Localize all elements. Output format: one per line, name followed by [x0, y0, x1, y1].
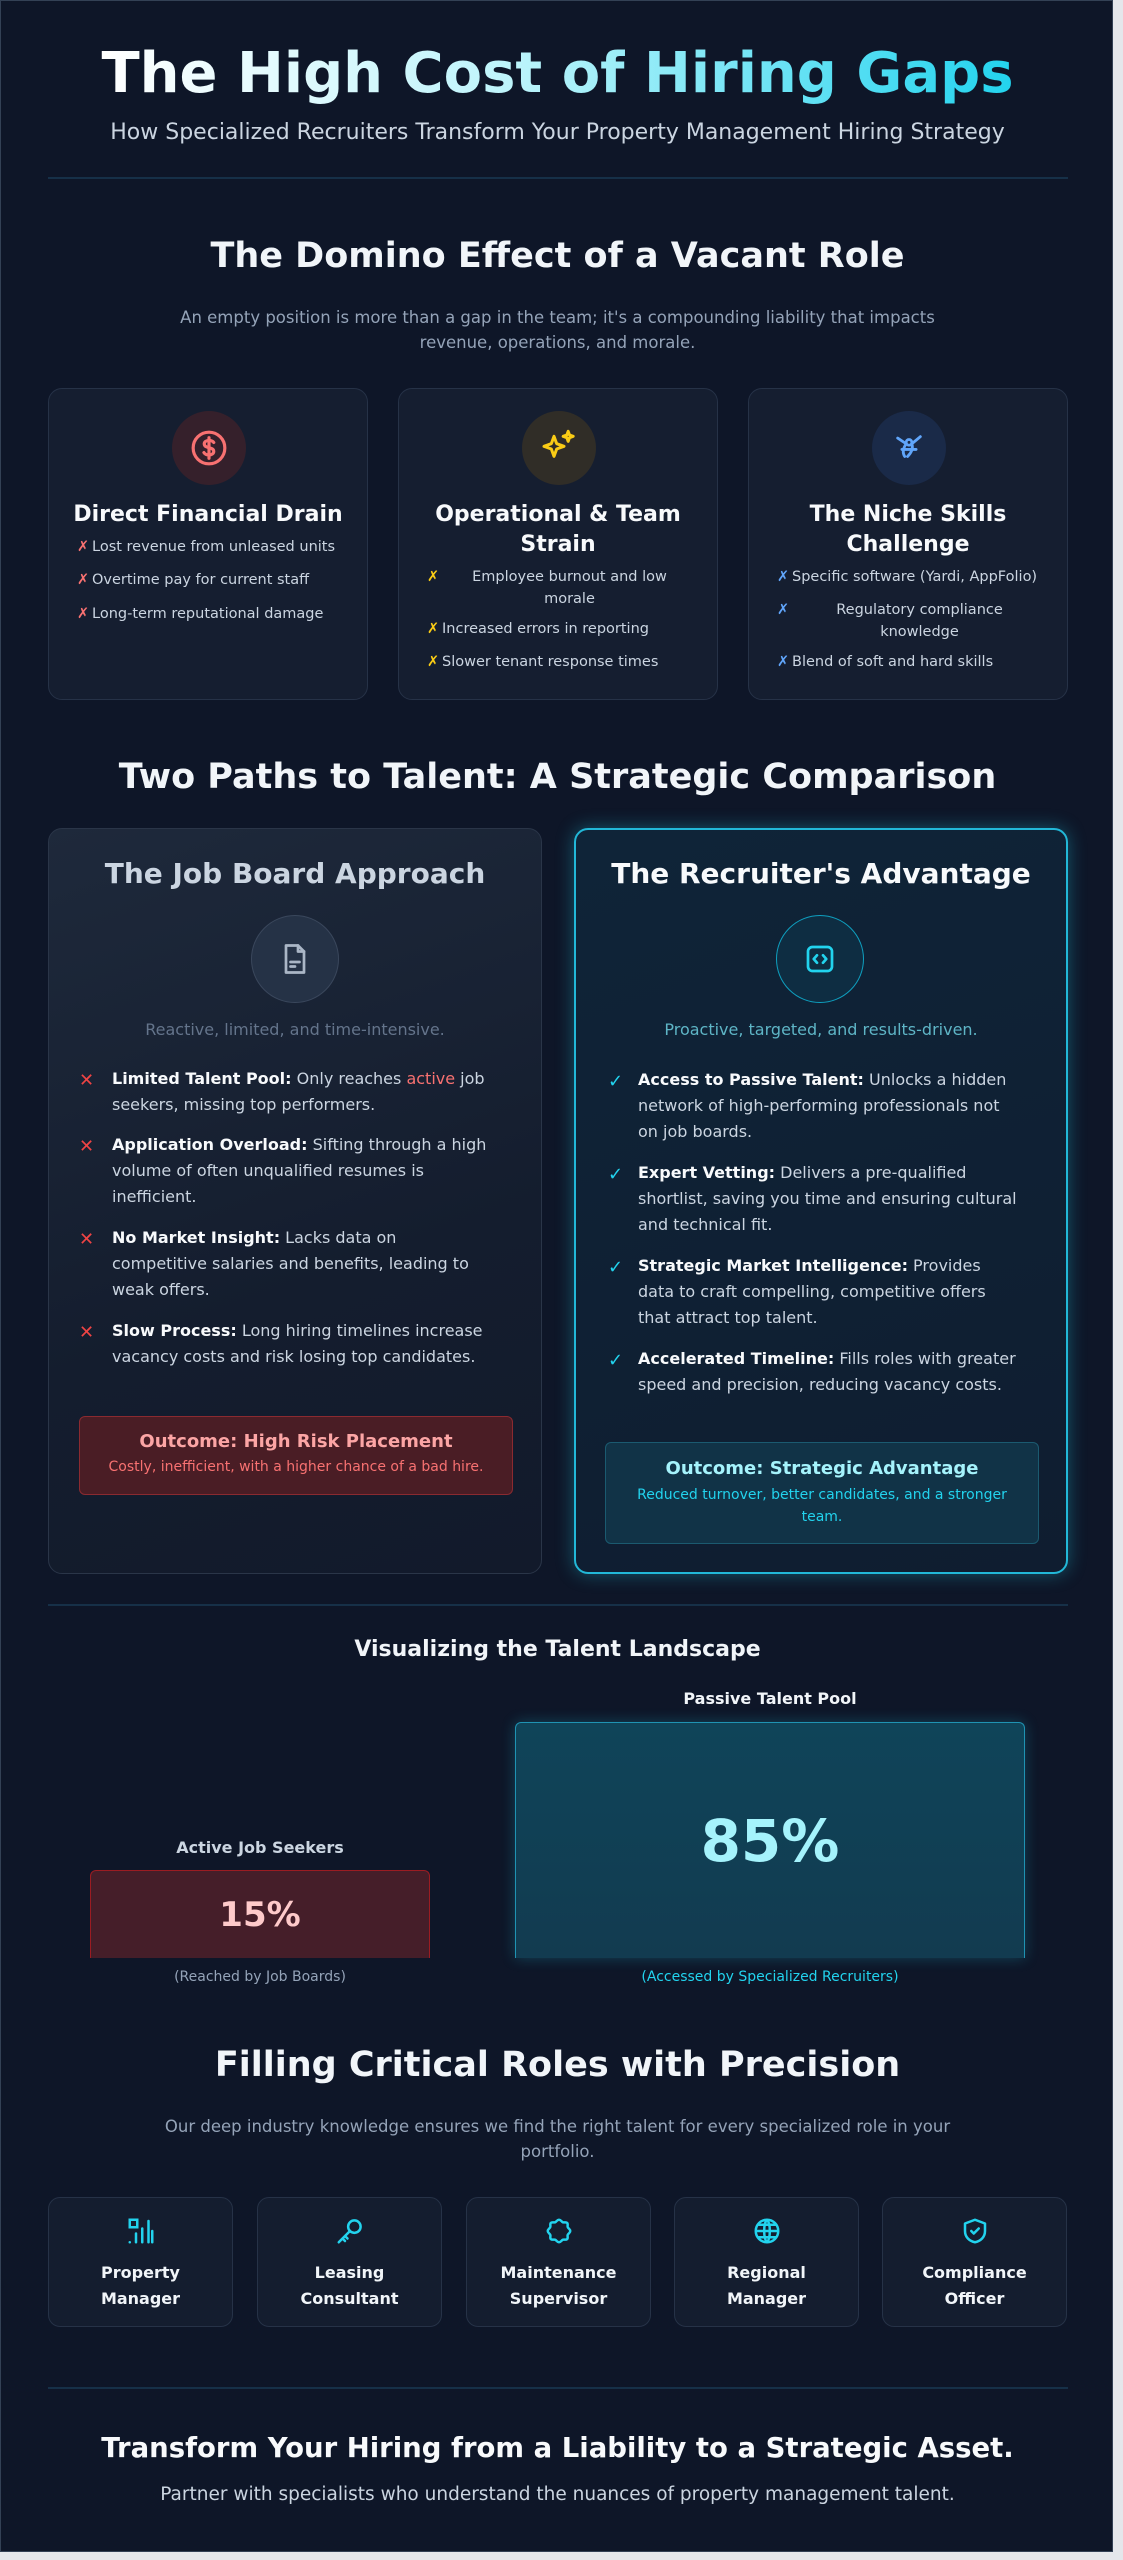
- intro paragraph: revenue, operations, and morale.: [420, 333, 695, 352]
- panel: niche skills: [748, 388, 1068, 700]
- bar: active 15%: 15%: [219, 1894, 301, 1934]
- list: drawbacks: ✕: [79, 1136, 94, 1157]
- list: advantages: Expert Vetting: Delivers a pre-qualified: [638, 1163, 966, 1182]
- list: drawbacks: volume of often unqualified resumes is: [112, 1161, 424, 1180]
- role: maintenance supervisor: Maintenance: [500, 2263, 616, 2282]
- list: [77, 539, 335, 622]
- roles paragraph: Our deep industry knowledge ensures we find the right talent for every specialized role in your: [165, 2117, 950, 2136]
- panel title: The Recruiter's Advantage: [611, 857, 1031, 890]
- list: Overtime pay for current staff: [92, 572, 309, 588]
- list: Lost revenue from unleased units: [92, 539, 335, 555]
- card title: Operational & Team: [435, 502, 681, 527]
- list: advantages: data to craft compelling, competitive offers: [638, 1282, 986, 1301]
- list: Blend of soft and hard skills: [792, 654, 993, 670]
- list: drawbacks: No Market Insight: Lacks data on: [112, 1228, 396, 1247]
- list: ✗: [77, 606, 89, 622]
- panel: direct financial drain: [48, 388, 368, 700]
- list: advantages: ✓: [608, 1350, 623, 1371]
- list: drawbacks: seekers, missing top performers.: [112, 1095, 375, 1114]
- list: Specific software (Yardi, AppFolio): [792, 569, 1037, 585]
- card title: Direct Financial Drain: [73, 502, 343, 527]
- list: morale: [544, 591, 595, 607]
- list: ✗: [77, 572, 89, 588]
- title: The High Cost of Hiring Gaps: [101, 41, 1014, 106]
- list: ✗: [777, 654, 789, 670]
- list: Long-term reputational damage: [92, 606, 323, 622]
- role: compliance officer: Officer: [945, 2289, 1004, 2308]
- list: advantages: and technical fit.: [638, 1215, 772, 1234]
- list: ✗: [777, 602, 789, 618]
- callout: strategic outcome: [605, 1442, 1039, 1544]
- callout: strategic outcome: team.: [802, 1509, 842, 1525]
- role: regional manager: Regional: [727, 2263, 806, 2282]
- bar: active 15%: [90, 1870, 430, 1958]
- callout: high risk outcome: [79, 1416, 513, 1495]
- bar: passive 85%: 85%: [701, 1806, 839, 1874]
- list: [427, 569, 667, 670]
- role: maintenance supervisor: Supervisor: [510, 2289, 607, 2308]
- intro paragraph: [180, 308, 935, 352]
- list: ✗: [777, 569, 789, 585]
- callout: high risk outcome: Outcome: High Risk Placement: [139, 1431, 453, 1452]
- list: advantages: shortlist, saving you time and ensuring cultural: [638, 1189, 1017, 1208]
- heading: domino effect: The Domino Effect of a Vacant Role: [210, 236, 905, 276]
- icon: sparkles: [522, 411, 596, 485]
- list: Employee burnout and low: [472, 569, 667, 585]
- role: leasing consultant: Consultant: [300, 2289, 398, 2308]
- list: ✗: [427, 569, 439, 585]
- card title: [810, 502, 1006, 557]
- list: advantages: speed and precision, reducing vacancy costs.: [638, 1375, 1002, 1394]
- role: regional manager: [674, 2197, 859, 2327]
- list: drawbacks: Limited Talent Pool: Only reaches active job: [112, 1069, 485, 1088]
- role: property manager: [48, 2197, 233, 2327]
- panel: operational strain: [398, 388, 718, 700]
- list: knowledge: [880, 624, 959, 640]
- list: drawbacks: ✕: [79, 1229, 94, 1250]
- role: property manager: Property: [101, 2263, 180, 2282]
- list: ✗: [427, 621, 439, 637]
- list: advantages: Accelerated Timeline: Fills roles with greater: [638, 1349, 1016, 1368]
- list: [777, 569, 1037, 670]
- role: property manager: Manager: [101, 2289, 180, 2308]
- list: advantages: network of high-performing professionals not: [638, 1096, 1000, 1115]
- callout: high risk outcome: Costly, inefficient, with a higher chance of a bad hire.: [109, 1459, 483, 1475]
- list: drawbacks: Slow Process: Long hiring timelines increase: [112, 1321, 483, 1340]
- card title: The Niche Skills: [810, 502, 1006, 527]
- caption: passive: (Accessed by Specialized Recruiters): [641, 1969, 899, 1985]
- list: Slower tenant response times: [442, 654, 658, 670]
- list: drawbacks: ✕: [79, 1070, 94, 1091]
- list: drawbacks: vacancy costs and risk losing top candidates.: [112, 1347, 475, 1366]
- list: advantages: Strategic Market Intelligence: Provides: [638, 1256, 981, 1275]
- CTA heading: Transform Your Hiring from a Liability to a Strategic Asset.: [101, 2432, 1014, 2464]
- heading: talent landscape: Visualizing the Talent Landscape: [354, 1637, 761, 1662]
- list: drawbacks: weak offers.: [112, 1280, 210, 1299]
- roles paragraph: [165, 2117, 950, 2161]
- icon: document: [251, 915, 339, 1003]
- panel: recruiter's advantage: [574, 828, 1068, 1574]
- list: drawbacks: competitive salaries and benefits, leading to: [112, 1254, 469, 1273]
- card title: Challenge: [846, 532, 970, 557]
- list: drawbacks: inefficient.: [112, 1187, 196, 1206]
- bar: passive 85%: [515, 1722, 1025, 1958]
- CTA subtext: Partner with specialists who understand the nuances of property management talent.: [160, 2484, 955, 2505]
- list: drawbacks: Application Overload: Sifting through a high: [112, 1135, 486, 1154]
- icon: code box: [776, 915, 864, 1003]
- list: advantages: ✓: [608, 1164, 623, 1185]
- role: leasing consultant: Leasing: [315, 2263, 384, 2282]
- intro paragraph: An empty position is more than a gap in the team; it's a compounding liability that impacts: [180, 308, 935, 327]
- tagline: Proactive, targeted, and results-driven.: [664, 1020, 978, 1039]
- caption: active: (Reached by Job Boards): [174, 1969, 346, 1985]
- role: compliance officer: [882, 2197, 1067, 2327]
- list: advantages: ✓: [608, 1257, 623, 1278]
- list: advantages: that attract top talent.: [638, 1308, 818, 1327]
- list: advantages: Access to Passive Talent: Unlocks a hidden: [638, 1070, 1006, 1089]
- heading: filling critical roles: Filling Critical Roles with Precision: [215, 2045, 900, 2085]
- list: Increased errors in reporting: [442, 621, 649, 637]
- list: drawbacks: [79, 1069, 486, 1366]
- list: ✗: [427, 654, 439, 670]
- tagline: Reactive, limited, and time-intensive.: [145, 1020, 445, 1039]
- list: Regulatory compliance: [836, 602, 1003, 618]
- role: regional manager: Manager: [727, 2289, 806, 2308]
- role: leasing consultant: [257, 2197, 442, 2327]
- list: drawbacks: ✕: [79, 1322, 94, 1343]
- label: active: Active Job Seekers: [176, 1838, 344, 1857]
- list: advantages: [608, 1070, 1017, 1394]
- role: compliance officer: Compliance: [922, 2263, 1027, 2282]
- panel title: The Job Board Approach: [105, 857, 485, 890]
- roles paragraph: portfolio.: [521, 2142, 594, 2161]
- list: advantages: ✓: [608, 1071, 623, 1092]
- icon: dollar: [172, 411, 246, 485]
- subtitle: How Specialized Recruiters Transform Your Property Management Hiring Strategy: [110, 120, 1005, 145]
- list: ✗: [77, 539, 89, 555]
- callout: strategic outcome: Outcome: Strategic Advantage: [666, 1458, 978, 1479]
- label: passive: Passive Talent Pool: [683, 1689, 857, 1708]
- role: maintenance supervisor: [466, 2197, 651, 2327]
- card title: Strain: [520, 532, 596, 557]
- icon: skills: [872, 411, 946, 485]
- bar chart: talent pools: [90, 1689, 1032, 1985]
- callout: strategic outcome: Reduced turnover, better candidates, and a stronger: [637, 1487, 1007, 1503]
- card title: [435, 502, 681, 557]
- heading: two paths: Two Paths to Talent: A Strategic Comparison: [119, 757, 996, 797]
- list: advantages: on job boards.: [638, 1122, 752, 1141]
- panel: job board approach: [48, 828, 542, 1574]
